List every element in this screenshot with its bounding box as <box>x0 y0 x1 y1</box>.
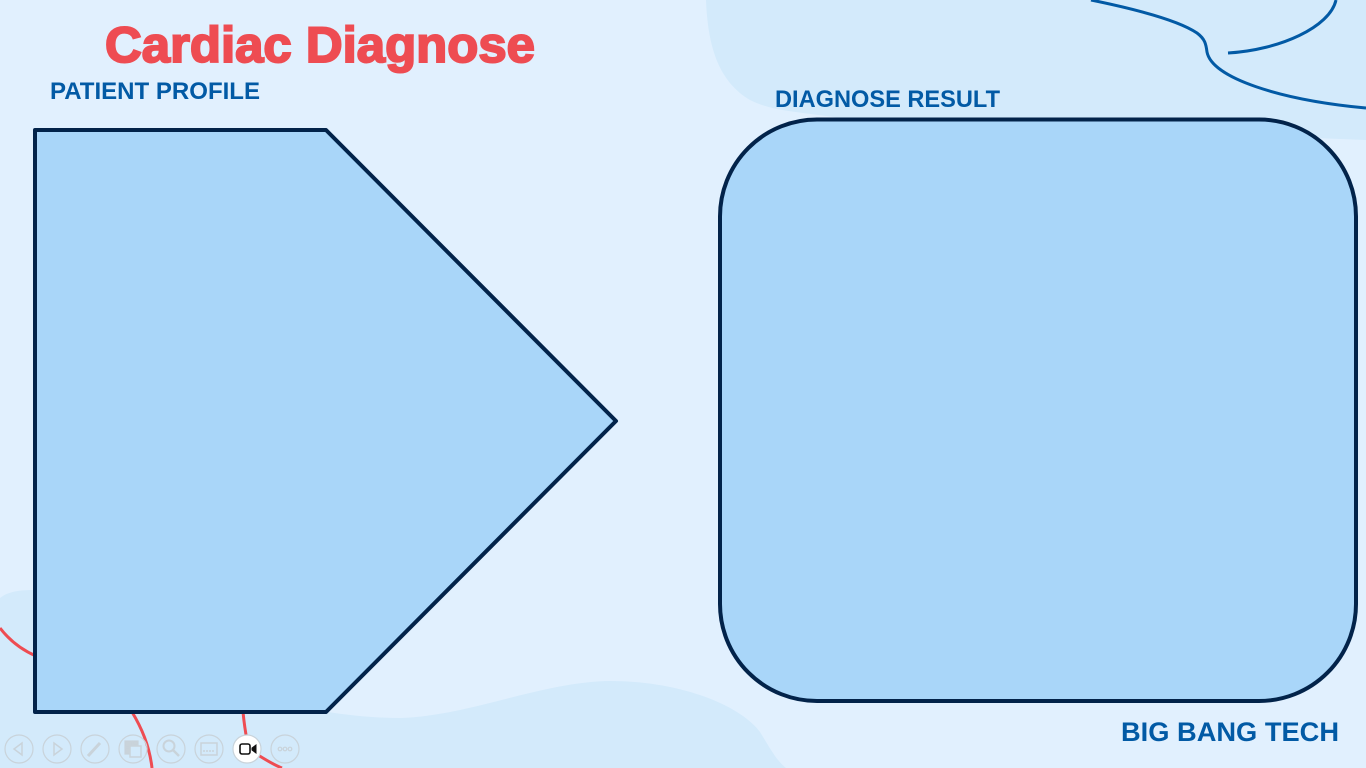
decorative line: top right outer curve <box>1091 0 1366 108</box>
icon: subtitles <box>195 735 223 763</box>
icon: video camera, active <box>233 735 261 763</box>
decorative line: bottom red curve right <box>243 712 282 768</box>
icon: slides <box>119 735 147 763</box>
icon: more <box>271 735 299 763</box>
decorative line: top right inner curve <box>1228 0 1336 53</box>
slideshow controls toolbar <box>5 735 299 763</box>
heading: patient profile: PATIENT PROFILE <box>50 78 260 105</box>
background blob: bottom <box>0 590 786 768</box>
icon: magnifier <box>157 735 185 763</box>
title: Cardiac Diagnose <box>105 17 535 73</box>
icon: previous <box>5 735 33 763</box>
footer brand text: BIG BANG TECH <box>1121 717 1339 747</box>
decorative line: bottom red curve under controls <box>132 712 152 768</box>
panel: diagnose result <box>720 120 1356 701</box>
icon: next <box>43 735 71 763</box>
panel: patient profile <box>35 130 616 712</box>
heading: diagnose result: DIAGNOSE RESULT <box>775 86 1000 113</box>
icon: pen <box>81 735 109 763</box>
decorative line: bottom left red curve <box>0 628 36 656</box>
background blob: top right <box>706 0 1366 140</box>
